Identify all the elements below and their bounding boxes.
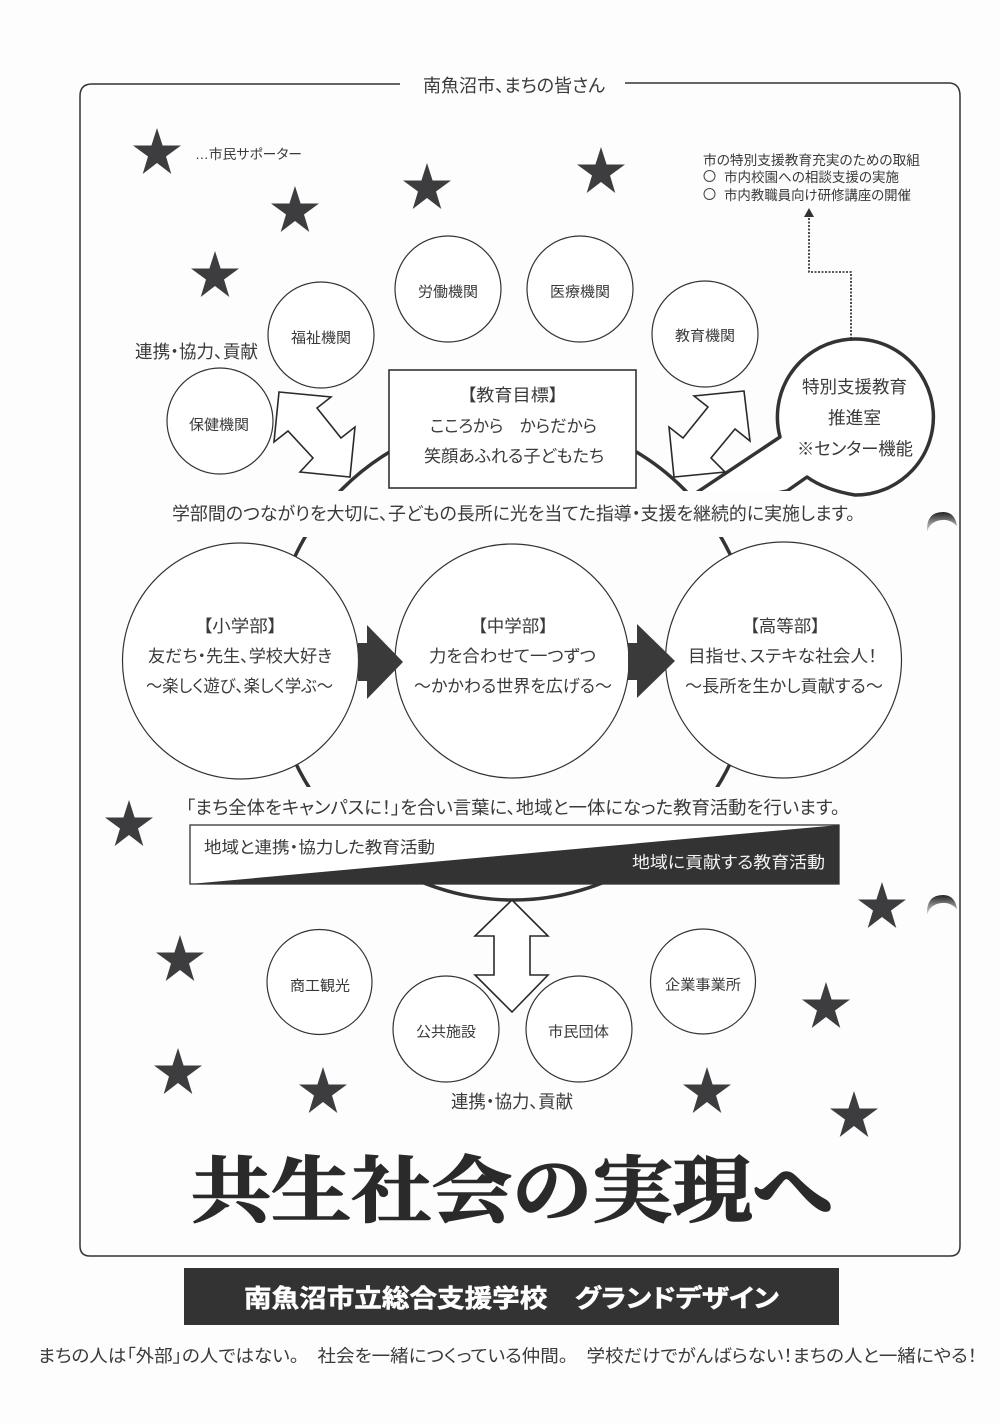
panel: education goal box: 【教育目標】 [467, 386, 558, 405]
label: cooperation top: 連携・協力、貢献 [135, 342, 258, 362]
circle: 中学部: ～かかわる世界を広げる～ [414, 677, 612, 696]
note: city initiatives: 市の特別支援教育充実のための取組 [703, 153, 920, 168]
panel: band sentence 学部間: 学部間のつながりを大切に、子どもの長所に光を当てた指導・支援を継続的に実施します。 [172, 504, 855, 524]
circle: 中学部 [395, 544, 629, 778]
icon: punch hole bottom [927, 895, 957, 915]
circle: 企業事業所 [650, 929, 756, 1034]
circle: 福祉機関 [268, 282, 374, 388]
legend: citizen supporter star [133, 128, 302, 174]
circle: 保健機関 [167, 368, 273, 474]
circle: 高等部: 目指せ、ステキな社会人！ [688, 647, 877, 666]
circle: 中学部: 【中学部】 [478, 617, 548, 636]
icon: speech bubble 特別支援教育推進室: 推進室 [828, 408, 881, 428]
arrow: dotted to note [804, 208, 851, 339]
circle: 教育機関 [652, 281, 758, 387]
circle: 労働機関 [395, 236, 501, 342]
circle: 医療機関: 医療機関 [550, 284, 610, 301]
panel: rounded frame [80, 83, 960, 1256]
circle: 教育機関: 教育機関 [675, 328, 735, 345]
label: cooperation bottom: 連携・協力、貢献 [451, 1092, 573, 1112]
icon: speech bubble 特別支援教育推進室: 特別支援教育 [802, 377, 907, 397]
circle: 小学部: 【小学部】 [203, 617, 277, 636]
heading: frame title: 南魚沼市、まちの皆さん [423, 76, 606, 96]
circle: 商工観光: 商工観光 [290, 978, 350, 995]
central ring [272, 418, 754, 900]
circle: 商工観光 [267, 930, 372, 1034]
icon: punch hole top [927, 512, 957, 532]
arrow: vertical double arrow [475, 900, 548, 1012]
circle: 小学部 [122, 543, 358, 779]
note: city initiatives: 市内校園への相談支援の実施 [724, 170, 899, 185]
chart: wedge bar: 地域に貢献する教育活動 [632, 853, 825, 872]
circle: 中学部: 力を合わせて一つずつ [429, 647, 596, 666]
banner: school grand design: 南魚沼市立総合支援学校 グランドデザイン [244, 1284, 779, 1313]
legend: citizen supporter star: …市民サポーター [195, 147, 302, 162]
circle: 保健機関: 保健機関 [189, 417, 249, 434]
arrow: 小学部 to 中学部 [358, 625, 403, 699]
circle: 市民団体: 市民団体 [548, 1024, 610, 1041]
panel: education goal box [389, 370, 636, 488]
circle: 公共施設: 公共施設 [416, 1024, 477, 1041]
icon: speech bubble 特別支援教育推進室 [660, 339, 933, 517]
circle: 公共施設 [393, 976, 499, 1082]
banner: school grand design [184, 1268, 839, 1325]
chart: wedge bar [190, 825, 839, 884]
panel: education goal box: 笑顔あふれる子どもたち [424, 447, 604, 466]
circle: 福祉機関: 福祉機関 [291, 330, 351, 347]
panel: band sentence 学部間 [150, 491, 855, 537]
chart: wedge bar: 地域と連携・協力した教育活動 [204, 838, 435, 857]
icon: speech bubble 特別支援教育推進室: ※センター機能 [797, 439, 913, 459]
circle: 市民団体 [526, 976, 632, 1082]
circle: 高等部: 【高等部】 [750, 617, 820, 636]
circle: 企業事業所: 企業事業所 [665, 977, 741, 994]
panel: education goal box: こころから からだから [430, 417, 597, 436]
note: city initiatives: 市内教職員向け研修講座の開催 [724, 188, 911, 203]
text: bottom message: まちの人は「外部」の人ではない。 社会を一緒につくっている仲間。 学校だけでがんばらない！まちの人と一緒にやる！ [38, 1346, 977, 1366]
title: 共生社会の実現へ: 共生社会の実現へ [191, 1152, 833, 1232]
circle: 小学部: 友だち・先生、学校大好き [148, 647, 332, 666]
panel: campus sentence mask [150, 787, 880, 826]
arrow: right double arrow [669, 391, 750, 477]
circle: 高等部 [666, 542, 902, 778]
stars: lower group [105, 800, 906, 1137]
circle: 労働機関: 労働機関 [418, 284, 478, 301]
arrow: left double arrow [274, 392, 355, 477]
circle: 小学部: ～楽しく遊び、楽しく学ぶ～ [146, 677, 333, 696]
panel: campus sentence mask: 「まち全体をキャンパスに！」を合い言葉に、地域と一体になった教育活動を行います。 [186, 798, 840, 818]
stars: top group [191, 147, 625, 297]
circle: 医療機関 [527, 236, 633, 342]
note: city initiatives [703, 153, 920, 203]
circle: 高等部: ～長所を生かし貢献する～ [685, 677, 883, 696]
arrow: 中学部 to 高等部 [628, 624, 675, 698]
